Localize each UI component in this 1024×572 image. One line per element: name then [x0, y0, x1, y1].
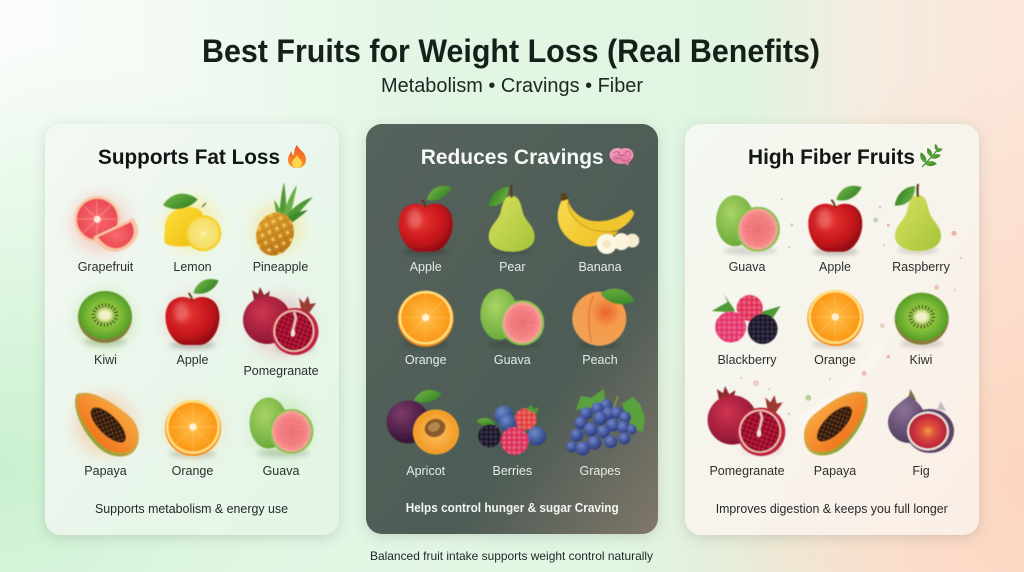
label: pear: Pear [499, 260, 526, 274]
caption: reduces cravings: Helps control hunger & sugar Craving [406, 501, 619, 515]
fruit: pomegranate [708, 386, 785, 456]
label: lemon: Lemon [173, 260, 212, 274]
icon: fire [288, 145, 306, 168]
label: orange: Orange [405, 353, 447, 367]
fruit: apricot [386, 389, 459, 454]
label: fig: Fig [912, 464, 930, 478]
label: guava: Guava [729, 260, 765, 274]
footer note: Balanced fruit intake supports weight control naturally [370, 549, 653, 563]
label: berries: Berries [493, 464, 532, 478]
label: kiwi: Kiwi [94, 353, 117, 367]
fruit: lemon [162, 193, 221, 251]
fruit: guava [716, 195, 780, 255]
fruit: kiwi [895, 293, 949, 348]
label: apple: Apple [410, 260, 442, 274]
panel: reduces cravings [366, 124, 658, 534]
label: banana: Banana [578, 260, 622, 274]
label: apple: Apple [177, 353, 209, 367]
label: papaya: Papaya [814, 464, 856, 478]
label: apple: Apple [819, 260, 851, 274]
label: raspberry: Raspberry [892, 260, 951, 274]
label: pineapple: Pineapple [253, 260, 308, 274]
label: pomegranate: Pomegranate [709, 464, 785, 478]
panel background [45, 124, 339, 535]
fruit: guava [250, 398, 314, 458]
heading: supports fat loss: Supports Fat Loss [98, 146, 280, 169]
fruit: orange [165, 400, 221, 458]
fruit: orange [398, 291, 454, 349]
label: kiwi: Kiwi [910, 353, 932, 367]
caption: high fiber fruits: Improves digestion & keeps you full longer [716, 502, 948, 516]
fruit: pear (raspberry label) [891, 183, 941, 254]
label: guava: Guava [263, 464, 299, 478]
fruit: banana [558, 192, 639, 254]
subtitle: Metabolism • Cravings • Fiber [381, 75, 643, 97]
fruit: mixed berries [712, 294, 781, 344]
fruit: pomegranate [243, 287, 318, 355]
fruit: papaya [793, 378, 882, 466]
panel background [366, 124, 658, 534]
fruit: berries [476, 405, 546, 455]
fruit: peach [572, 284, 637, 349]
panel: high fiber fruits [685, 124, 979, 535]
heading: high fiber fruits: High Fiber Fruits [748, 146, 915, 169]
decorative speckles [740, 198, 962, 420]
fruit: orange [807, 290, 863, 348]
fruit: kiwi [78, 291, 132, 347]
label: blackberry: Blackberry [717, 353, 777, 367]
fruit: pineapple [250, 182, 313, 261]
heading: reduces cravings: Reduces Cravings [421, 146, 604, 169]
label: orange: Orange [172, 464, 213, 478]
icon: leaf sprig [919, 144, 943, 167]
label: grapes: Grapes [580, 464, 620, 478]
label: guava: Guava [494, 353, 531, 367]
panel: supports fat loss [45, 124, 339, 535]
fruit: apple [166, 276, 221, 349]
label: orange: Orange [814, 353, 856, 367]
title: Best Fruits for Weight Loss (Real Benefits) [202, 33, 820, 69]
caption: supports fat loss: Supports metabolism & energy use [95, 502, 288, 516]
label: grapefruit: Grapefruit [78, 260, 134, 274]
label: pomegranate: Pomegranate [243, 364, 319, 378]
fruit: guava [480, 289, 544, 348]
panel background [685, 124, 979, 535]
fruit: pear [484, 184, 535, 254]
icon: brain [610, 148, 634, 166]
label: apricot: Apricot [406, 464, 446, 478]
fruit: grapes [566, 389, 645, 455]
fruit: apple [399, 182, 454, 256]
fruit: apple [808, 182, 864, 256]
fruit: fig [888, 389, 954, 453]
label: peach: Peach [582, 353, 618, 367]
fruit: grapefruit [72, 196, 138, 252]
fruit: papaya [61, 379, 149, 467]
label: papaya: Papaya [84, 464, 127, 478]
